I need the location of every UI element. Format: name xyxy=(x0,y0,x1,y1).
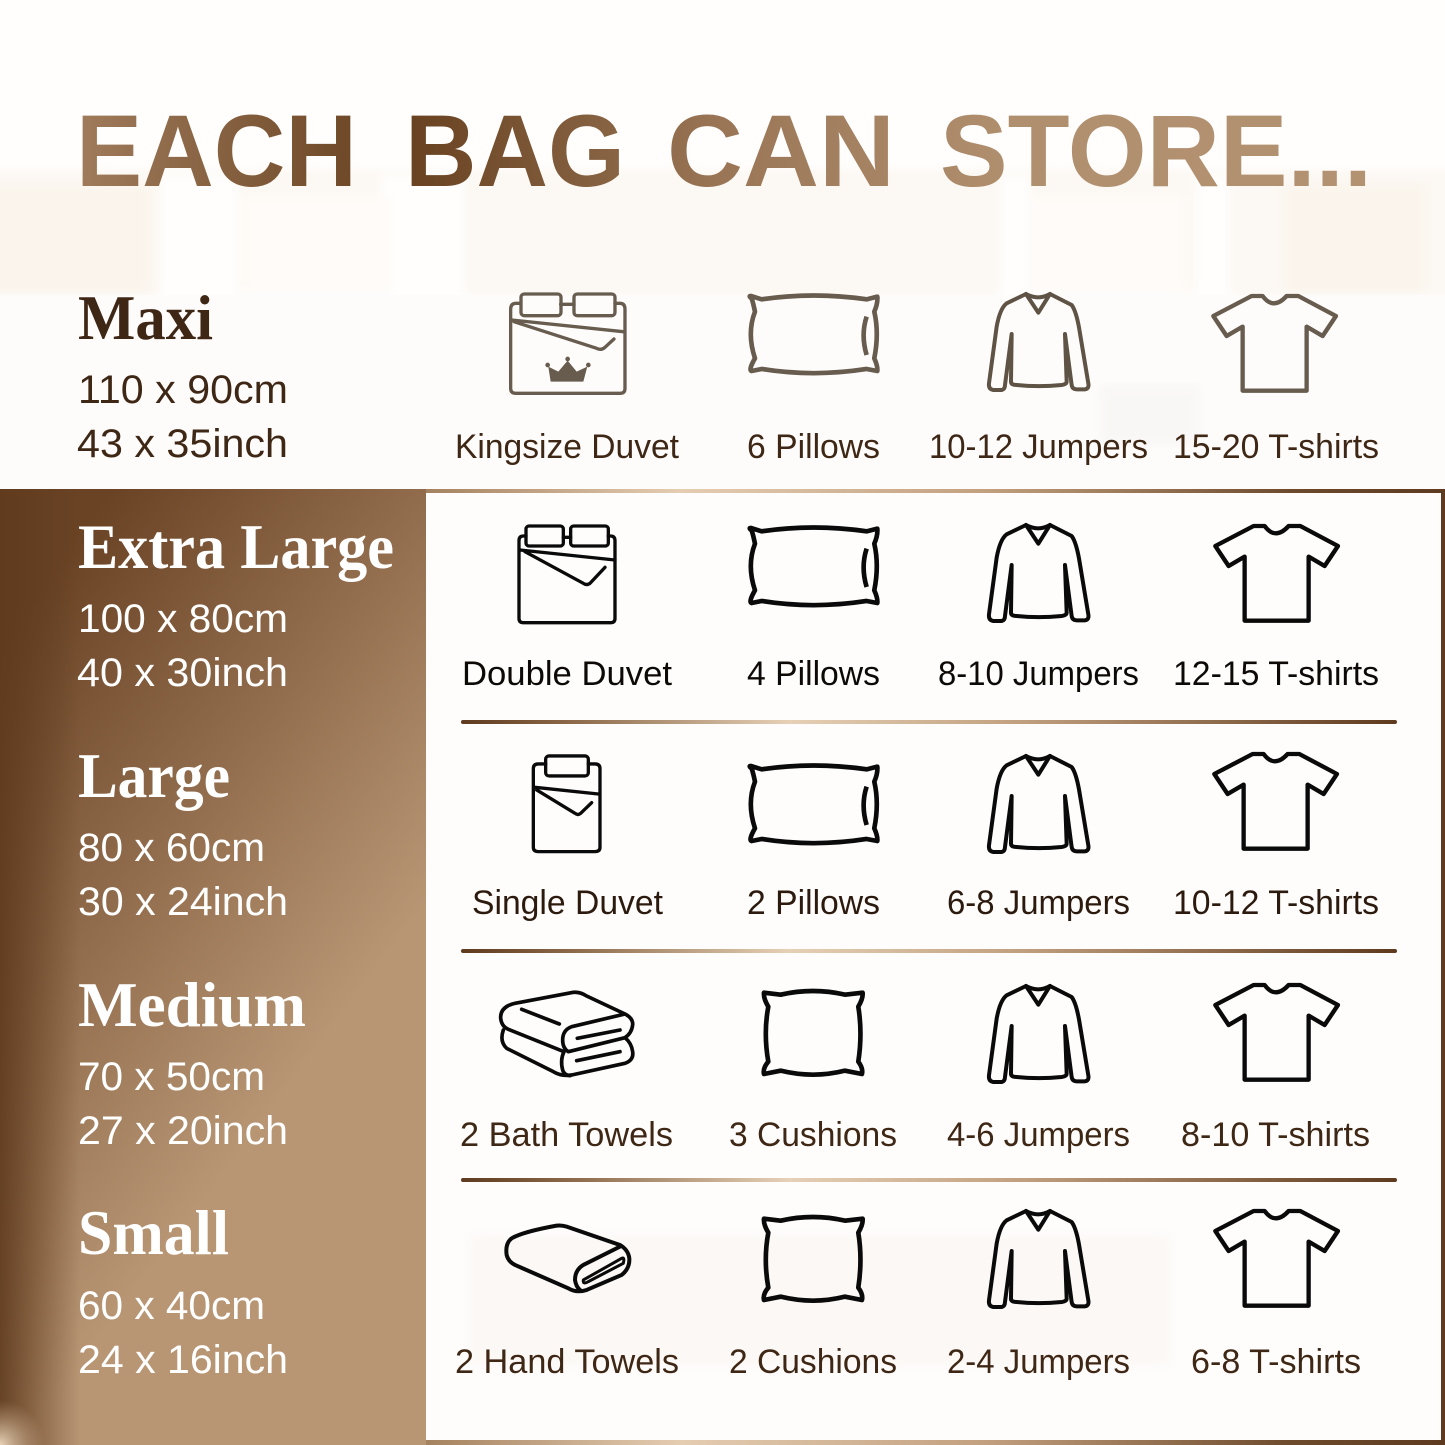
dimensions: Large cm: 80 x 60cm xyxy=(78,826,265,870)
icon: cushion xyxy=(764,1217,863,1301)
label: 2 Cushions: 2 Cushions xyxy=(729,1343,897,1381)
size: Small xyxy=(78,1197,288,1382)
label: 2 Hand Towels: 2 Hand Towels xyxy=(455,1343,679,1381)
icon: cushion xyxy=(764,991,863,1075)
icon: t-shirt xyxy=(1215,985,1338,1080)
icon: t-shirt xyxy=(1213,296,1336,391)
label: 4 Pillows: 4 Pillows xyxy=(747,655,880,693)
label: 6 Pillows: 6 Pillows xyxy=(747,428,880,466)
icon: king duvet xyxy=(511,294,625,393)
dimensions: Maxi inch: 43 x 35inch xyxy=(77,422,288,466)
row 1: Maxi contents xyxy=(455,294,1379,466)
icon: single duvet xyxy=(533,756,600,852)
icon: jumper xyxy=(989,986,1089,1082)
icon: pillow xyxy=(750,527,877,605)
label: 10-12 T-shirts: 10-12 T-shirts xyxy=(1173,884,1379,922)
heading: Maxi: Maxi xyxy=(78,282,213,353)
label: 2-4 Jumpers: 2-4 Jumpers xyxy=(947,1343,1130,1381)
label: Double Duvet: Double Duvet xyxy=(462,655,673,693)
icon: t-shirt xyxy=(1215,1211,1338,1306)
size: Maxi xyxy=(77,282,288,466)
heading: Small: Small xyxy=(78,1197,229,1268)
icon: pillow xyxy=(750,765,877,843)
heading: Extra Large: Extra Large xyxy=(78,511,394,582)
row 5: Small contents xyxy=(455,1211,1361,1381)
dimensions: Small cm: 60 x 40cm xyxy=(78,1284,265,1328)
dimensions: Large inch: 30 x 24inch xyxy=(78,880,288,924)
label: 12-15 T-shirts: 12-15 T-shirts xyxy=(1173,655,1379,693)
label: 6-8 T-shirts: 6-8 T-shirts xyxy=(1191,1343,1361,1381)
icon: t-shirt xyxy=(1215,526,1338,621)
label: 2 Pillows: 2 Pillows xyxy=(747,884,880,922)
row 2: Extra Large contents xyxy=(462,525,1379,693)
dimensions: Extra Large inch: 40 x 30inch xyxy=(77,651,288,695)
icon: t-shirt xyxy=(1214,754,1337,849)
dimensions: Medium cm: 70 x 50cm xyxy=(78,1055,265,1099)
label: 3 Cushions: 3 Cushions xyxy=(729,1116,897,1154)
icon: pillow xyxy=(750,295,877,373)
heading: Large: Large xyxy=(78,740,230,811)
size: Large xyxy=(78,740,288,924)
label: 8-10 T-shirts: 8-10 T-shirts xyxy=(1181,1116,1370,1154)
panel: size column xyxy=(0,489,426,1445)
label: Kingsize Duvet: Kingsize Duvet xyxy=(455,428,680,466)
icon: double duvet xyxy=(519,526,615,623)
heading: Medium: Medium xyxy=(78,969,306,1040)
icon: jumper xyxy=(989,294,1089,390)
dimensions: Medium inch: 27 x 20inch xyxy=(78,1109,288,1153)
title: STORE... xyxy=(940,94,1372,208)
label: 2 Bath Towels: 2 Bath Towels xyxy=(460,1116,673,1154)
panel: contents table xyxy=(426,489,1445,1445)
label: 8-10 Jumpers: 8-10 Jumpers xyxy=(938,655,1139,693)
label: 15-20 T-shirts: 15-20 T-shirts xyxy=(1173,428,1379,466)
dimensions: Small inch: 24 x 16inch xyxy=(78,1338,288,1382)
title: EACH xyxy=(76,94,357,208)
dimensions: Maxi cm: 110 x 90cm xyxy=(78,368,288,412)
icon: bath towels xyxy=(501,992,633,1076)
icon: hand towel xyxy=(506,1225,629,1291)
label: Single Duvet: Single Duvet xyxy=(472,884,664,922)
icon: jumper xyxy=(989,525,1089,621)
title: CAN xyxy=(667,94,895,208)
label: 10-12 Jumpers: 10-12 Jumpers xyxy=(929,428,1148,466)
label: 6-8 Jumpers: 6-8 Jumpers xyxy=(947,884,1130,922)
size: Medium xyxy=(78,969,306,1153)
icon: jumper xyxy=(989,1211,1089,1307)
row 4: Medium contents xyxy=(460,985,1370,1154)
dimensions: Extra Large cm: 100 x 80cm xyxy=(78,597,288,641)
title xyxy=(76,94,1372,208)
row 3: Large contents xyxy=(472,754,1379,922)
size: Extra Large xyxy=(77,511,394,695)
label: 4-6 Jumpers: 4-6 Jumpers xyxy=(947,1116,1130,1154)
icon: jumper xyxy=(989,756,1089,852)
title: BAG xyxy=(405,94,625,208)
